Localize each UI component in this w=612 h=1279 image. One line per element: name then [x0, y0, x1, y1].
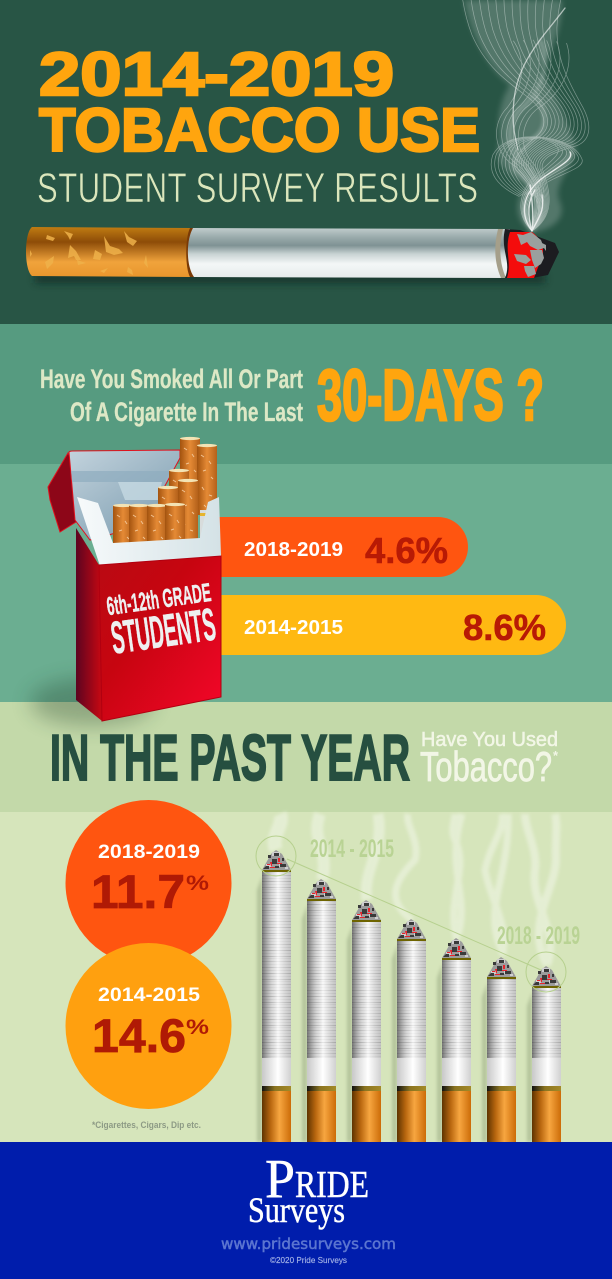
- stat circle: 2018-2019: %: [186, 872, 209, 895]
- heading: 30-day question: Have You Smoked All Or Part: [40, 364, 303, 394]
- bar: 2014-2015: 8.6%: [463, 607, 546, 648]
- trend line with markers: [256, 836, 566, 992]
- title: 2014-2019: [39, 40, 394, 108]
- panel: footer background: [0, 1142, 612, 1279]
- stat circle: 2014-2015: 2014-2015: [98, 985, 200, 1006]
- title: [39, 40, 480, 164]
- icon: lit cigarette: [26, 227, 559, 283]
- stat circle: 2018-2019: 11.7: [91, 865, 185, 918]
- title: TOBACCO USE: [39, 96, 480, 164]
- chart: cigarette bars: [257, 850, 561, 1142]
- label: 2014 - 2015: 2014 - 2015: [310, 835, 394, 863]
- stat circle: 2018-2019: 2018-2019: [98, 842, 200, 863]
- bar: cigarette 4: [397, 919, 426, 1142]
- bar: 2018-2019: [210, 517, 468, 577]
- stat circle: 2018-2019: [66, 800, 232, 966]
- panel: 30-day question background: [0, 324, 612, 464]
- subtitle: STUDENT SURVEY RESULTS: [37, 164, 478, 211]
- pack label: 6th-12th GRADE: [105, 577, 213, 621]
- logo: Pride Surveys: RIDE: [295, 1164, 369, 1206]
- bar: cigarette 1: [262, 850, 291, 1142]
- logo: Pride Surveys: P: [265, 1148, 295, 1209]
- copyright: ©2020 Pride Surveys: [270, 1255, 347, 1265]
- bar: cigarette 6: [487, 957, 516, 1142]
- logo: Pride Surveys: Surveys: [248, 1190, 345, 1230]
- heading: have you used tobacco: Have You Used: [421, 729, 558, 751]
- heading: 30-day question: Of A Cigarette In The Last: [70, 397, 303, 427]
- panel: 30-day results background: [0, 464, 612, 702]
- bar: 2014-2015: 2014-2015: [244, 617, 343, 639]
- heading: have you used tobacco: [420, 729, 559, 790]
- bar: cigarette 5: [442, 938, 471, 1142]
- icon: header smoke: [462, 0, 612, 237]
- heading: have you used tobacco: Tobacco?: [420, 743, 552, 790]
- stat circle: 2014-2015: 14.6: [92, 1009, 186, 1062]
- bar: 2014-2015: [210, 595, 566, 655]
- footnote: *Cigarettes, Cigars, Dip etc.: [92, 1120, 201, 1130]
- pack label: [105, 577, 219, 664]
- panel: past year results background: [0, 812, 612, 1142]
- icon: smoke above cigarette chart: [275, 814, 556, 965]
- heading: have you used tobacco: *: [553, 748, 559, 763]
- panel: past year heading background: [0, 702, 612, 812]
- heading: 30-day question: [40, 364, 303, 427]
- panel: header background: [0, 0, 612, 324]
- icon: cigarette pack: [30, 437, 221, 726]
- bar: cigarette 3: [352, 900, 381, 1142]
- stat circle: 2014-2015: %: [186, 1016, 209, 1039]
- bar: cigarette 7: [532, 966, 561, 1142]
- stat circle: 2014-2015: [66, 943, 232, 1109]
- bar: cigarette 2: [307, 879, 336, 1142]
- bar: 2018-2019: 4.6%: [365, 530, 448, 571]
- infographic: STUDENTS: [108, 598, 219, 664]
- bar: 2018-2019: 2018-2019: [244, 539, 343, 561]
- logo: Pride Surveys: [248, 1148, 369, 1230]
- website url: www.pridesurveys.com: [221, 1235, 396, 1253]
